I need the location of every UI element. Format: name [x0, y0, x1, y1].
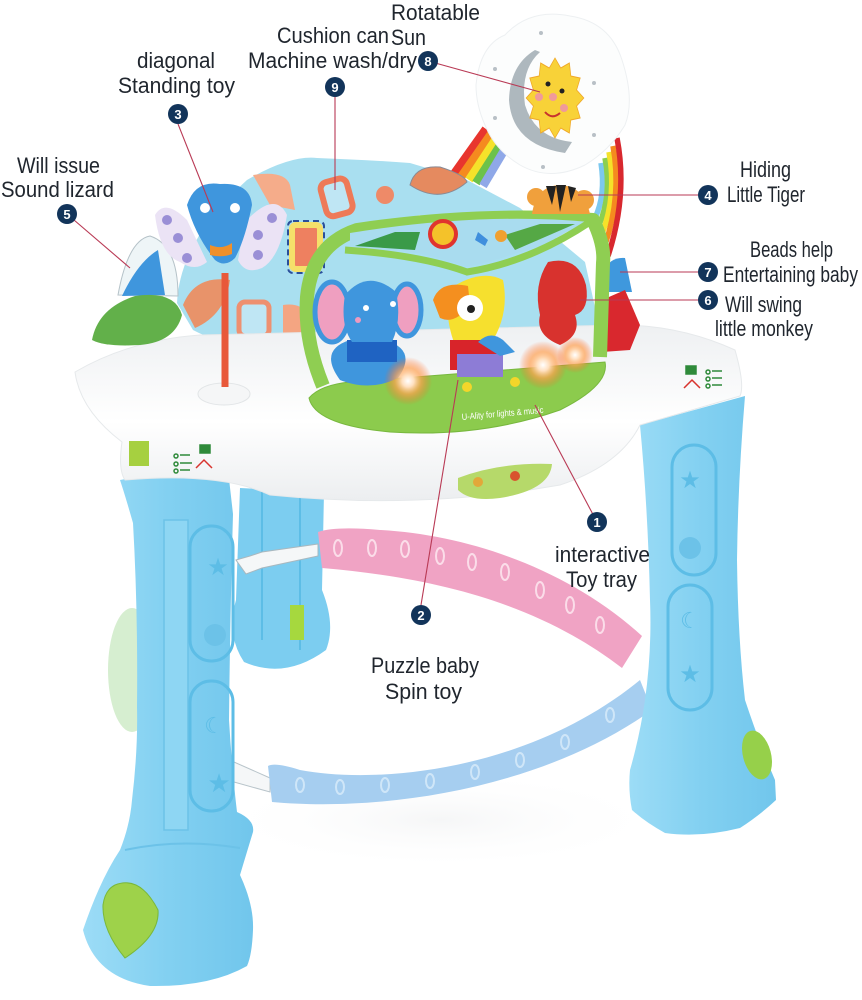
- callout 3: diagonal standing toy: diagonal: [137, 48, 215, 73]
- front left leg: ☾: [204, 713, 224, 738]
- pink padded tube: [318, 528, 642, 668]
- callout 9: cushion machine wash/dry: Machine wash/dry: [248, 48, 417, 73]
- callout 5: will issue sound lizard: 5: [63, 207, 71, 222]
- icon: pale green ball behind leg: [108, 608, 156, 732]
- callout 6: will swing little monkey: Will swing: [725, 292, 802, 317]
- tray base: [75, 325, 742, 501]
- callout 5: will issue sound lizard: Sound lizard: [1, 177, 114, 202]
- icon: rotatable sun panel: [476, 14, 629, 173]
- callout 1: interactive toy tray: 1: [593, 515, 601, 530]
- callout 6: will swing little monkey: little monkey: [715, 316, 813, 341]
- callout 7: beads help entertaining baby: [698, 237, 858, 287]
- green arch: [307, 218, 603, 386]
- toy tray: [309, 362, 605, 433]
- callout 8: rotatable sun: Rotatable: [391, 0, 480, 25]
- callout lines: [67, 61, 708, 605]
- callout 5: will issue sound lizard: Will issue: [17, 153, 100, 178]
- callout 7: beads help entertaining baby: 7: [704, 265, 712, 280]
- callout 9: cushion machine wash/dry: Cushion can: [277, 23, 389, 48]
- icon: green heart button: [103, 883, 158, 958]
- lights: [384, 337, 593, 405]
- back leg: [232, 488, 330, 669]
- sticker: left legend: [174, 445, 212, 473]
- light blue padded tube: [234, 680, 652, 804]
- callout 7: beads help entertaining baby: Beads help: [750, 237, 833, 262]
- icon: swinging monkey: [538, 261, 587, 345]
- callout 9: cushion machine wash/dry: 9: [331, 80, 339, 95]
- callout 2: puzzle baby spin toy: [371, 605, 479, 704]
- seat cushion: [177, 158, 600, 357]
- callout 5: will issue sound lizard: [1, 153, 114, 224]
- callout 6: will swing little monkey: 6: [704, 293, 712, 308]
- callout 3: diagonal standing toy: 3: [174, 107, 182, 122]
- front right leg: ★: [679, 467, 701, 494]
- callout 2: puzzle baby spin toy: Spin toy: [385, 679, 462, 704]
- connector: white pink-tube clamp: [236, 544, 318, 574]
- icon: hiding tiger: [527, 185, 594, 214]
- front right leg: ★: [679, 661, 701, 688]
- floor shadow: [210, 770, 670, 870]
- icon: beads: [602, 258, 640, 352]
- sticker: centre scene: [458, 464, 552, 499]
- callout 3: diagonal standing toy: Standing toy: [118, 73, 235, 98]
- callout 8: rotatable sun: [391, 0, 480, 71]
- callout 8: rotatable sun: Sun: [391, 25, 426, 50]
- front right leg: ☾: [680, 608, 700, 633]
- callout 6: will swing little monkey: [698, 290, 813, 341]
- rainbow arches: [454, 129, 621, 256]
- callout 4: hiding little tiger: Hiding: [740, 157, 791, 182]
- front left leg: ★: [207, 554, 229, 581]
- icon: parrot toy: [433, 276, 515, 377]
- front left leg: ★: [207, 768, 231, 798]
- callout 4: hiding little tiger: Little Tiger: [727, 182, 805, 207]
- callout 4: hiding little tiger: 4: [704, 188, 712, 203]
- icon: elephant toy: [315, 281, 421, 386]
- sticker: green tab: [129, 441, 149, 466]
- icon: dragonfly standing toy: [155, 183, 287, 387]
- toy tray: U-Ality for lights & music: [461, 405, 544, 422]
- callout 2: puzzle baby spin toy: 2: [417, 608, 425, 623]
- callout 1: interactive toy tray: interactive: [555, 542, 650, 567]
- callout 4: hiding little tiger: [698, 157, 805, 207]
- sticker: right legend: [684, 366, 722, 388]
- front right leg: [629, 396, 777, 835]
- front left leg: [83, 470, 253, 986]
- callout 9: cushion machine wash/dry: [248, 23, 417, 97]
- callout 1: interactive toy tray: [555, 512, 650, 592]
- callout 1: interactive toy tray: Toy tray: [566, 567, 637, 592]
- icon: lizard globe: [92, 236, 182, 345]
- callout 3: diagonal standing toy: [118, 48, 235, 124]
- callout 2: puzzle baby spin toy: Puzzle baby: [371, 653, 479, 678]
- callout 8: rotatable sun: 8: [424, 54, 432, 69]
